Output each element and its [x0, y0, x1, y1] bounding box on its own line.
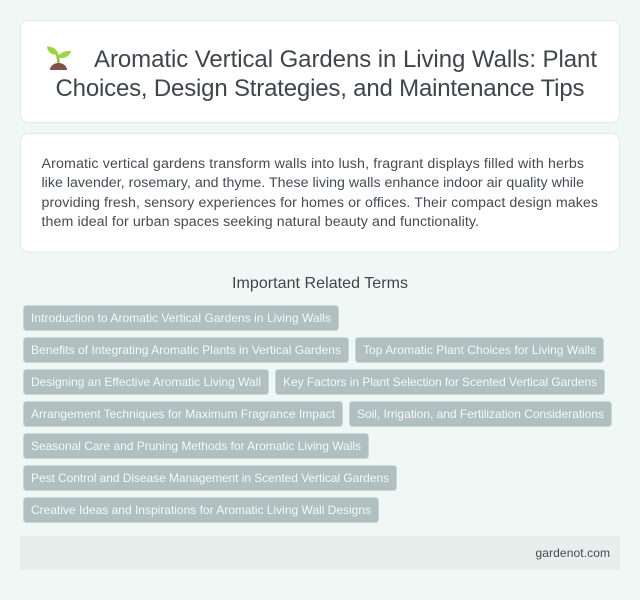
chip: top plant choices: [356, 338, 604, 362]
chip: introduction: Introduction to Aromatic Vertical Gardens in Living Walls: [31, 311, 331, 325]
footer bar: [20, 536, 620, 570]
description text: them ideal for urban spaces seeking natural beauty and functionality.: [42, 214, 479, 230]
chip: arrangement: Arrangement Techniques for Maximum Fragrance Impact: [31, 407, 336, 421]
chip: seasonal care: [24, 434, 368, 458]
chip: arrangement: [24, 402, 342, 426]
chip: designing: Designing an Effective Aromatic Living Wall: [31, 375, 261, 389]
chip: benefits: [24, 338, 348, 362]
heading: important related terms: Important Related Terms: [232, 275, 408, 292]
footer source: gardenot.com: [536, 546, 610, 560]
description text: [42, 156, 598, 230]
panel: description card: [20, 134, 620, 252]
description text: providing fresh, sensory experiences for homes or offices. Their compact design makes: [42, 195, 598, 211]
chip: top plant choices: Top Aromatic Plant Choices for Living Walls: [363, 343, 596, 357]
description text: like lavender, rosemary, and thyme. These living walls enhance indoor air quality while: [42, 175, 584, 191]
chip: key factors: [276, 370, 604, 394]
title text: Choices, Design Strategies, and Maintenance Tips: [56, 75, 584, 102]
chip: pest control: Pest Control and Disease Management in Scented Vertical Gardens: [31, 471, 389, 485]
chip: soil and irrigation: [350, 402, 612, 426]
title text: Aromatic Vertical Gardens in Living Walls: Plant: [94, 46, 597, 73]
icon: seedling: [47, 46, 71, 70]
chip: pest control: [24, 466, 396, 490]
chip: key factors: Key Factors in Plant Selection for Scented Vertical Gardens: [283, 375, 597, 389]
chip: creative ideas: Creative Ideas and Inspirations for Aromatic Living Wall Designs: [31, 503, 371, 517]
description text: Aromatic vertical gardens transform walls into lush, fragrant displays filled with herbs: [42, 156, 584, 172]
title text: [56, 46, 597, 102]
chip: introduction: [24, 306, 338, 330]
chip: designing: [24, 370, 268, 394]
chip: benefits: Benefits of Integrating Aromatic Plants in Vertical Gardens: [31, 343, 341, 357]
term chips: [24, 306, 612, 522]
chip: soil and irrigation: Soil, Irrigation, and Fertilization Considerations: [357, 407, 604, 421]
chip: seasonal care: Seasonal Care and Pruning Methods for Aromatic Living Walls: [31, 439, 361, 453]
chip: creative ideas: [24, 498, 378, 522]
panel: title card: [20, 20, 620, 122]
